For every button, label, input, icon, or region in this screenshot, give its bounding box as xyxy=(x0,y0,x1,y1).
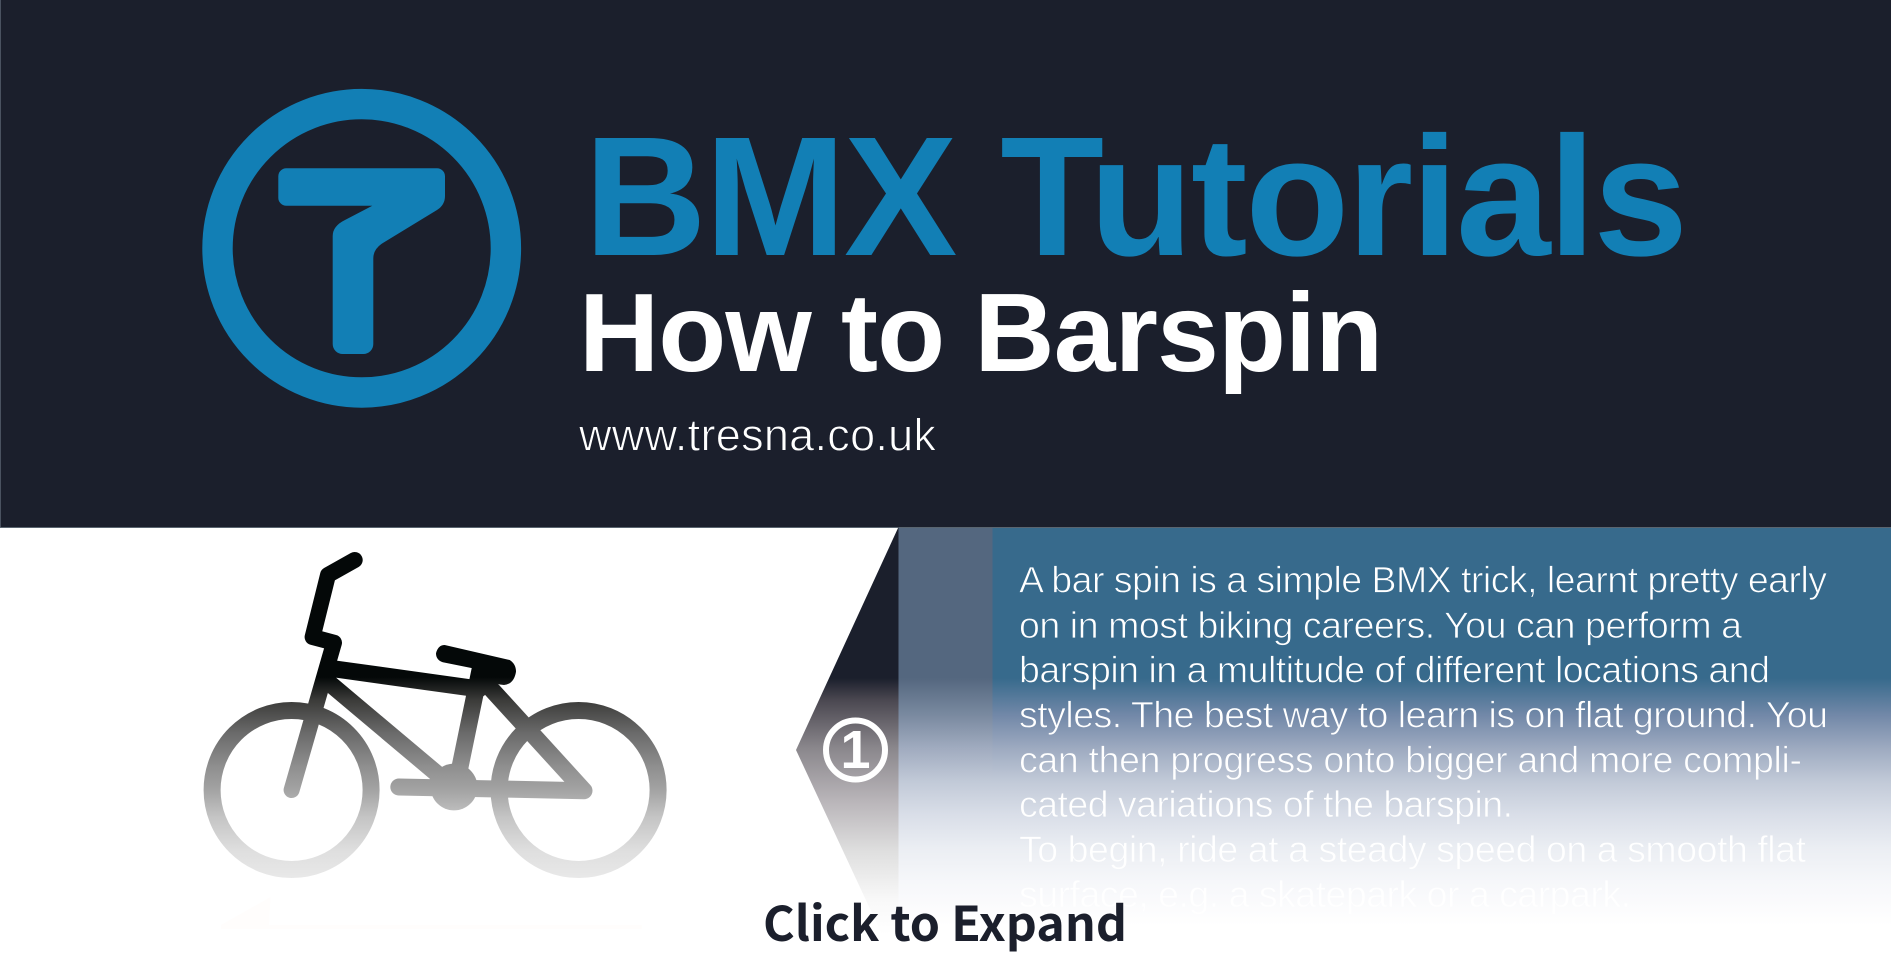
header band xyxy=(0,0,1891,528)
subtitle: How to Barspin xyxy=(579,271,1383,395)
text panel background xyxy=(992,528,1891,970)
step number xyxy=(826,720,885,780)
faint ground shadow xyxy=(221,897,642,929)
description text: on in most biking careers. You can perform a xyxy=(1019,604,1742,646)
crank xyxy=(431,764,477,810)
description text: surface, e.g. a skatepark or a carpark. xyxy=(1019,873,1631,915)
description text: To begin, ride at a steady speed on a smooth flat xyxy=(1019,828,1807,870)
seat xyxy=(436,645,516,685)
website url: www.tresna.co.uk xyxy=(578,410,936,461)
handlebar and fork xyxy=(292,560,355,790)
front wheel xyxy=(212,710,371,870)
title: BMX Tutorials xyxy=(584,102,1688,292)
description text: styles. The best way to learn is on flat ground. You xyxy=(1019,694,1828,736)
icon: tresna T logo xyxy=(218,104,506,392)
step arrow xyxy=(796,527,898,970)
frame xyxy=(328,668,584,791)
description text: cated variations of the barspin. xyxy=(1019,783,1513,825)
rear wheel xyxy=(499,710,658,870)
click to expand label: Click to Expand xyxy=(763,885,1127,955)
description text: barspin in a multitude of different locations and xyxy=(1019,649,1770,691)
description text: A bar spin is a simple BMX trick, learnt pretty early xyxy=(1019,559,1827,601)
vertical band xyxy=(898,528,992,970)
description text: can then progress onto bigger and more compli- xyxy=(1019,738,1802,780)
description text xyxy=(1019,559,1828,915)
step number: 1 xyxy=(840,720,871,780)
icon: bike xyxy=(212,560,658,870)
